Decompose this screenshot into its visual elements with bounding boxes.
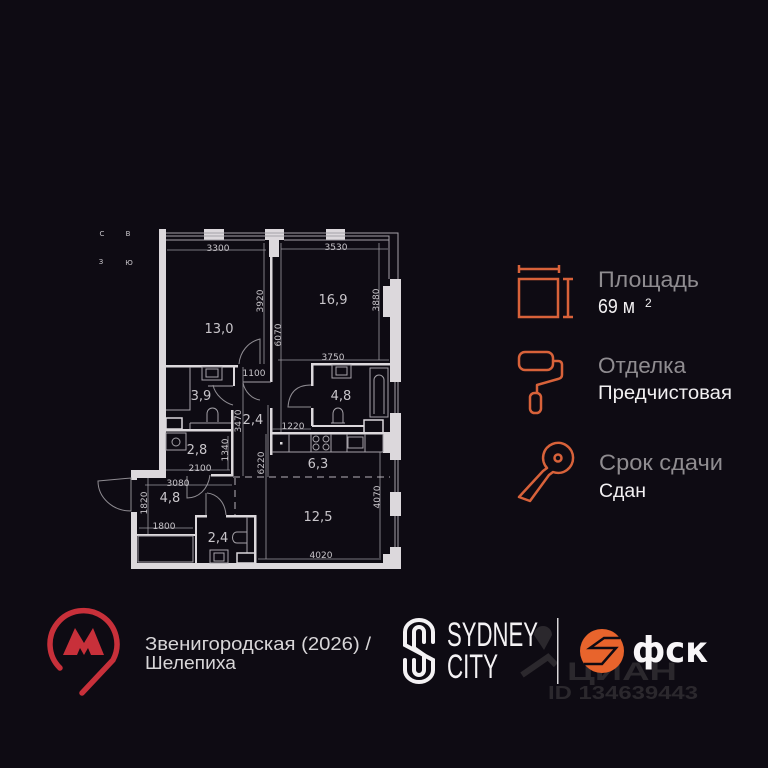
- dimension labels: 4020: [310, 551, 333, 561]
- dimension labels: 1820: [140, 491, 150, 514]
- text: area: Площадь: [598, 267, 699, 292]
- icon: metro marker: [50, 611, 117, 693]
- dimension labels: 3300: [207, 244, 230, 254]
- divider: [557, 618, 558, 684]
- watermark: ID 134639443: [548, 683, 698, 703]
- dimension labels: 3750: [322, 353, 345, 363]
- text: finish: Отделка: [598, 353, 687, 378]
- dimension lines: [139, 243, 389, 559]
- metro stations: [145, 634, 371, 673]
- icon: area: [519, 265, 573, 317]
- area labels: 2,4: [208, 531, 228, 546]
- area labels: 12,5: [304, 510, 332, 525]
- text: area: 69 м: [598, 296, 635, 318]
- text: area: 2: [645, 296, 652, 310]
- text: handover: [599, 450, 723, 502]
- text: handover: Срок сдачи: [599, 450, 723, 475]
- area labels: 6,3: [308, 457, 328, 472]
- logo: Sydney City: [405, 616, 538, 686]
- compass labels: Ю: [125, 259, 133, 267]
- area labels: 2,8: [187, 443, 207, 458]
- dimension labels: 3880: [372, 288, 382, 311]
- logo: Sydney City: SYDNEY: [447, 616, 538, 654]
- compass labels: З: [99, 258, 104, 266]
- dimension labels: 1340: [221, 438, 231, 461]
- area labels: 13,0: [205, 322, 233, 337]
- compass labels: В: [126, 230, 131, 238]
- doors: [98, 339, 311, 515]
- area labels: 2,4: [243, 413, 263, 428]
- area labels: 3,9: [191, 389, 211, 404]
- floor plan: [98, 229, 401, 569]
- logo: FSK: [580, 629, 708, 673]
- compass labels: [99, 230, 133, 267]
- dimension labels: 3080: [167, 479, 190, 489]
- area labels: 16,9: [319, 293, 347, 308]
- thin lines: [138, 233, 398, 563]
- dimension labels: [140, 243, 383, 561]
- kitchen sink dot: [280, 442, 282, 444]
- text: handover: Сдан: [599, 481, 646, 502]
- watermark: [522, 626, 698, 703]
- dimension labels: 3920: [256, 289, 266, 312]
- logo: FSK: фск: [632, 630, 708, 671]
- dimension labels: 3470: [234, 409, 244, 432]
- dimension labels: 6070: [274, 323, 284, 346]
- area labels: 4,8: [160, 491, 180, 506]
- dimension labels: 3530: [325, 243, 348, 253]
- dimension labels: 1220: [282, 422, 305, 432]
- watermark: ЦИАН: [567, 658, 677, 686]
- metro stations: Шелепиха: [145, 653, 237, 673]
- logo: Sydney City: CITY: [447, 648, 498, 686]
- compass labels: С: [100, 230, 105, 238]
- white utility boxes: [166, 418, 383, 563]
- dimension labels: 1800: [153, 522, 176, 532]
- dashed zone lines: [233, 477, 390, 515]
- walls: [131, 229, 401, 569]
- icon: key: [519, 443, 573, 501]
- dimension labels: 6220: [257, 451, 267, 474]
- text: finish: Предчистовая: [598, 383, 732, 404]
- metro stations: Звенигородская (2026) /: [145, 634, 371, 654]
- dimension labels: 4070: [373, 485, 383, 508]
- dimension labels: 2100: [189, 464, 212, 474]
- area labels: 4,8: [331, 389, 351, 404]
- area labels: [160, 293, 351, 546]
- dimension labels: 1100: [243, 369, 266, 379]
- text: area: [598, 267, 699, 318]
- icon: paint roller: [519, 352, 562, 413]
- text: finish: [598, 353, 732, 404]
